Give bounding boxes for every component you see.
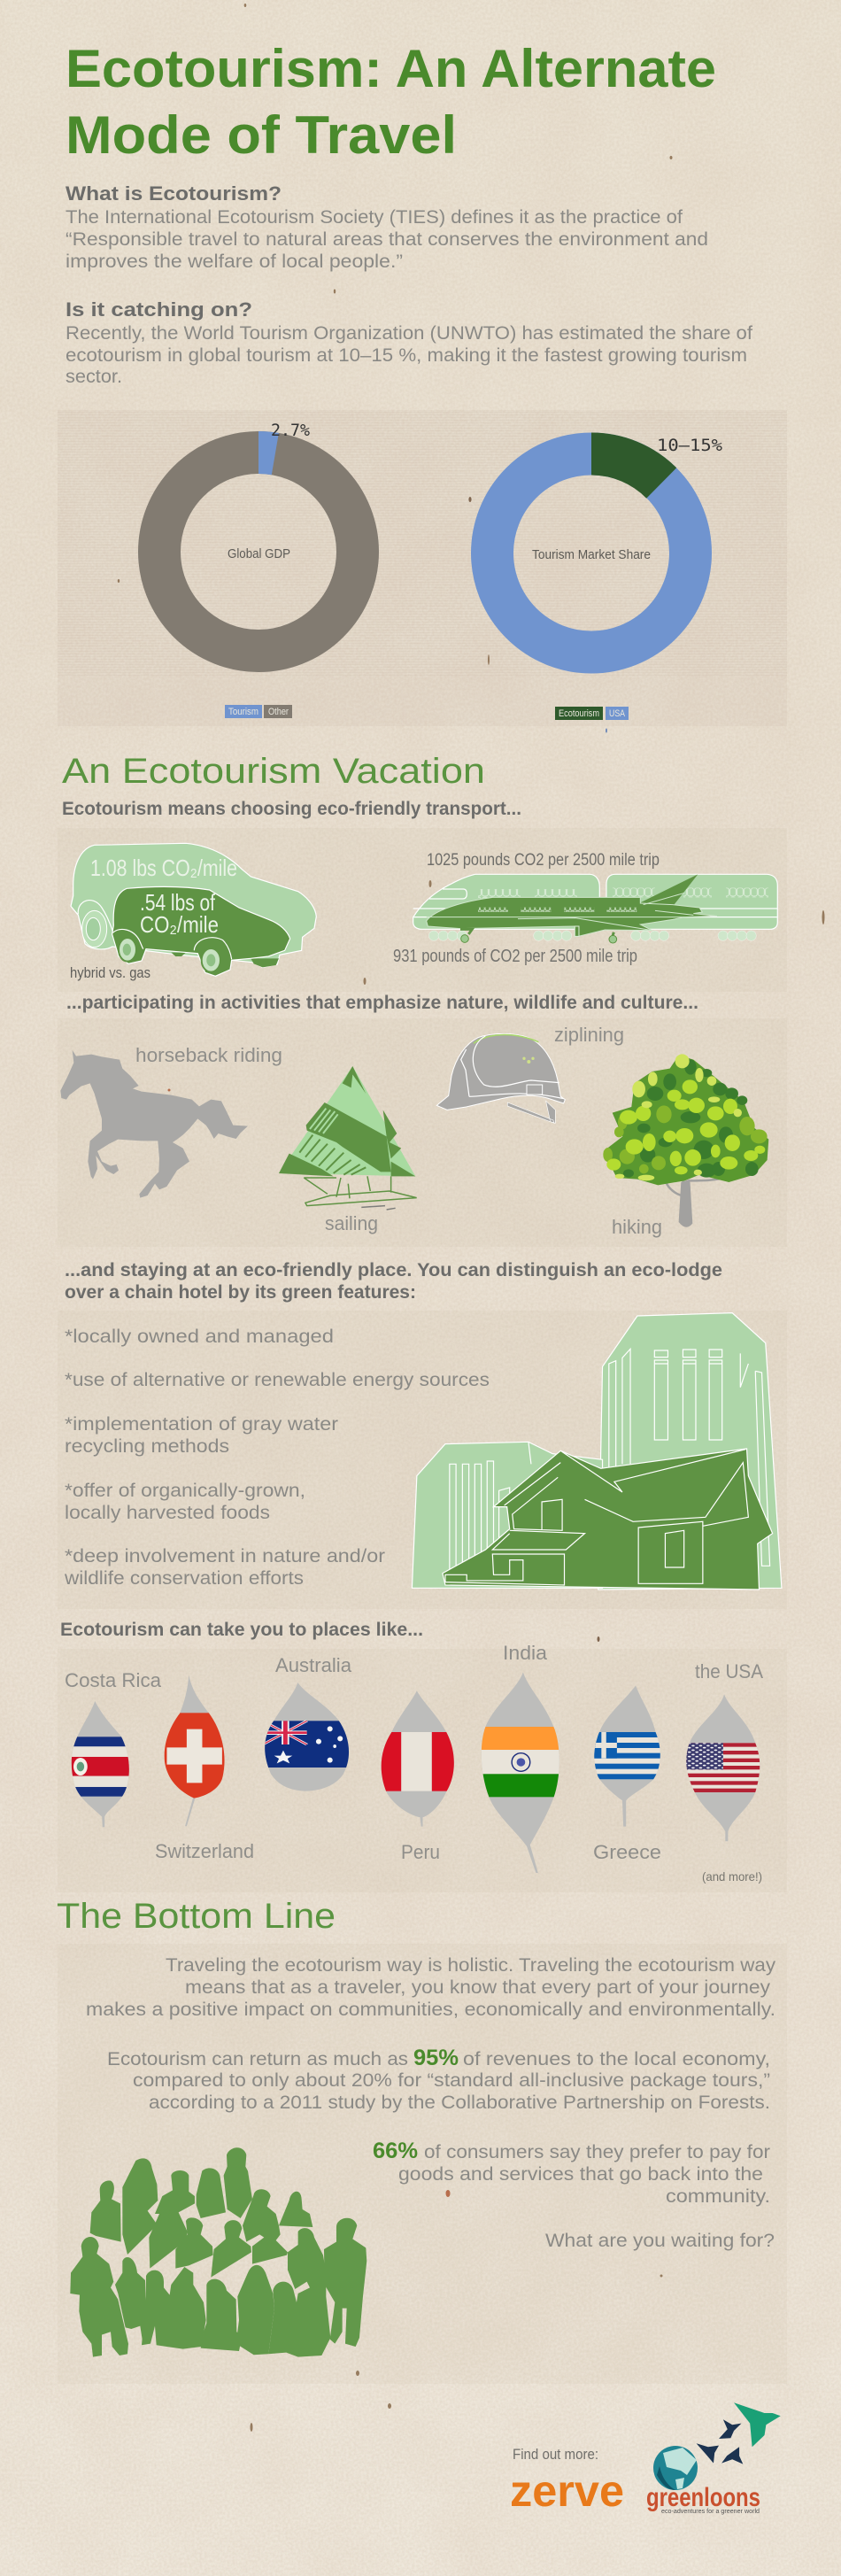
chart: global GDP donut xyxy=(159,421,358,651)
legend: global GDP xyxy=(225,705,292,718)
logo: zerve: zerve xyxy=(510,2466,624,2516)
text block: 95% statistic: 95% xyxy=(413,2046,459,2070)
list: eco-lodge features: *locally owned and managed xyxy=(65,1327,334,1347)
logo: greenloons: eco-adventures for a greener world xyxy=(661,2509,760,2515)
legend: global GDP: Tourism xyxy=(228,707,258,717)
text block: 66% statistic: 66% xyxy=(373,2139,418,2163)
heading: the bottom line: The Bottom Line xyxy=(57,1897,336,1936)
text block: is it catching on: sector. xyxy=(66,367,122,387)
label: hybrid car xyxy=(140,889,219,938)
icon: globe xyxy=(653,2446,698,2490)
list: eco-lodge features: *implementation of gray water xyxy=(65,1414,338,1435)
labels: countries: Australia xyxy=(275,1654,352,1676)
icon: sailboat xyxy=(279,1066,417,1210)
text block: holistic travel xyxy=(86,1955,776,2020)
text block: 95% statistic: according to a 2011 study by the Collaborative Partnership on Forests. xyxy=(149,2093,770,2113)
label: hybrid car: .54 lbs of xyxy=(140,889,216,916)
list: eco-lodge features: recycling methods xyxy=(65,1436,229,1457)
icon: tree xyxy=(603,1054,768,1227)
chart: tourism market share donut xyxy=(492,432,723,652)
title xyxy=(66,39,716,165)
text block: 66% statistic xyxy=(373,2139,770,2207)
text block: 66% statistic: community. xyxy=(666,2186,770,2207)
text block: is it catching on: ecotourism in global tourism at 10–15 %, making it the fastest growing tourism xyxy=(66,345,747,366)
icon: origami birds xyxy=(697,2402,781,2464)
labels: countries: Costa Rica xyxy=(65,1669,162,1691)
icon: helmet xyxy=(436,1033,565,1123)
legend: global GDP: Other xyxy=(268,707,289,717)
labels: countries: Greece xyxy=(593,1841,661,1863)
icon: Australia flag leaf xyxy=(260,1683,354,1791)
text block: holistic travel: makes a positive impact on communities, economically and environmentally. xyxy=(86,2000,775,2020)
list: eco-lodge features xyxy=(64,1327,490,1589)
text block: holistic travel: Traveling the ecotourism way is holistic. Traveling the ecotourism way xyxy=(166,1955,776,1976)
label: horseback riding: horseback riding xyxy=(135,1044,282,1066)
labels: countries: Peru xyxy=(401,1841,440,1863)
logo: greenloons: greenloons xyxy=(646,2483,760,2512)
panel: bottom line xyxy=(58,1944,787,2384)
labels: countries: India xyxy=(503,1642,548,1664)
label: plane emissions: 931 pounds of CO2 per 2500 mile trip xyxy=(393,947,637,966)
list: eco-lodge features: *deep involvement in nature and/or xyxy=(65,1546,385,1566)
subheading: eco-lodge xyxy=(65,1260,722,1303)
icon: hotel towers and eco-lodge xyxy=(412,1313,782,1590)
label: train emissions: 1025 pounds CO2 per 2500 mile trip xyxy=(427,851,660,870)
icon: Peru flag leaf xyxy=(381,1691,454,1827)
text block: holistic travel: means that as a traveler, you know that every part of your journey xyxy=(185,1977,771,1998)
chart: global GDP donut: 2.7% xyxy=(271,421,311,440)
chart: tourism market share donut: 10–15% xyxy=(657,436,723,455)
labels: countries xyxy=(65,1642,763,1884)
labels: countries: the USA xyxy=(695,1660,763,1683)
subheading: eco-lodge: ...and staying at an eco-friendly place. You can distinguish an eco-lodge xyxy=(65,1260,722,1280)
title: Mode of Travel xyxy=(66,105,457,165)
text block: what is ecotourism: “Responsible travel to natural areas that conserves the environment and xyxy=(66,229,708,250)
icon: hybrid and gas cars xyxy=(71,843,316,976)
icon: Greece flag leaf xyxy=(594,1686,660,1827)
text block: 95% statistic: compared to only about 20% for “standard all-inclusive package tours,” xyxy=(133,2070,770,2091)
list: eco-lodge features: wildlife conservation efforts xyxy=(64,1568,304,1589)
icon: India flag leaf xyxy=(482,1672,559,1873)
text block: 66% statistic: goods and services that go back into the xyxy=(398,2164,763,2185)
labels: countries: (and more!) xyxy=(702,1869,762,1884)
icon: train and plane xyxy=(413,874,777,943)
subheading: places: Ecotourism can take you to places like... xyxy=(60,1620,423,1640)
text block: what is ecotourism: The International Ecotourism Society (TIES) defines it as the practice of xyxy=(66,207,683,228)
label: hybrid car: CO₂/mile xyxy=(140,911,219,938)
text block: 66% statistic: of consumers say they prefer to pay for xyxy=(424,2142,770,2162)
text block: 95% statistic: Ecotourism can return as much as xyxy=(107,2049,408,2069)
text block: is it catching on: Is it catching on? xyxy=(66,298,252,321)
text block: 95% statistic: of revenues to the local economy, xyxy=(463,2049,770,2069)
title: Ecotourism: An Alternate xyxy=(66,39,716,98)
text block: call to action: What are you waiting for? xyxy=(545,2231,775,2251)
text block: 95% statistic xyxy=(107,2046,770,2113)
legend: market share: USA xyxy=(609,708,626,719)
legend: market share xyxy=(555,707,629,720)
subheading: eco-lodge: over a chain hotel by its green features: xyxy=(65,1282,416,1303)
logo: greenloons xyxy=(646,2402,781,2515)
icon: horse xyxy=(60,1050,248,1198)
list: eco-lodge features: *offer of organically-grown, xyxy=(65,1481,305,1501)
label: hiking: hiking xyxy=(612,1216,662,1238)
icon: crowd silhouette xyxy=(70,2147,366,2357)
icon: Costa Rica flag leaf xyxy=(71,1701,129,1828)
labels: countries: Switzerland xyxy=(155,1840,254,1862)
legend: market share: Ecotourism xyxy=(559,708,599,719)
chart: tourism market share donut: Tourism Market Share xyxy=(532,547,651,562)
text block: what is ecotourism: improves the welfare of local people.” xyxy=(66,251,403,272)
label: gas car: 1.08 lbs CO₂/mile xyxy=(90,855,237,881)
text: find out more: Find out more: xyxy=(513,2446,598,2463)
panel: donut charts xyxy=(58,410,787,726)
label: sailing: sailing xyxy=(325,1212,378,1234)
list: eco-lodge features: locally harvested foods xyxy=(65,1503,270,1523)
panel: destinations xyxy=(58,1642,787,1892)
heading: an ecotourism vacation: An Ecotourism Vacation xyxy=(62,752,485,791)
panel: activities xyxy=(58,1018,787,1247)
icon: USA flag leaf xyxy=(686,1695,760,1842)
label: ziplining: ziplining xyxy=(554,1024,624,1046)
icon: Switzerland flag leaf xyxy=(165,1675,225,1826)
text block: is it catching on xyxy=(66,298,752,387)
subheading: transport: Ecotourism means choosing eco-friendly transport... xyxy=(62,799,521,819)
text block: is it catching on: Recently, the World Tourism Organization (UNWTO) has estimated the share of xyxy=(66,323,752,344)
caption: hybrid vs gas: hybrid vs. gas xyxy=(70,964,150,981)
chart: global GDP donut: Global GDP xyxy=(228,546,290,561)
list: eco-lodge features: *use of alternative or renewable energy sources xyxy=(65,1370,490,1390)
text block: what is ecotourism xyxy=(66,182,708,272)
text block: what is ecotourism: What is Ecotourism? xyxy=(66,182,282,205)
panel: green features xyxy=(58,1311,787,1609)
subheading: activities: ...participating in activities that emphasize nature, wildlife and culture... xyxy=(66,993,698,1013)
panel: transport comparison xyxy=(58,828,787,992)
